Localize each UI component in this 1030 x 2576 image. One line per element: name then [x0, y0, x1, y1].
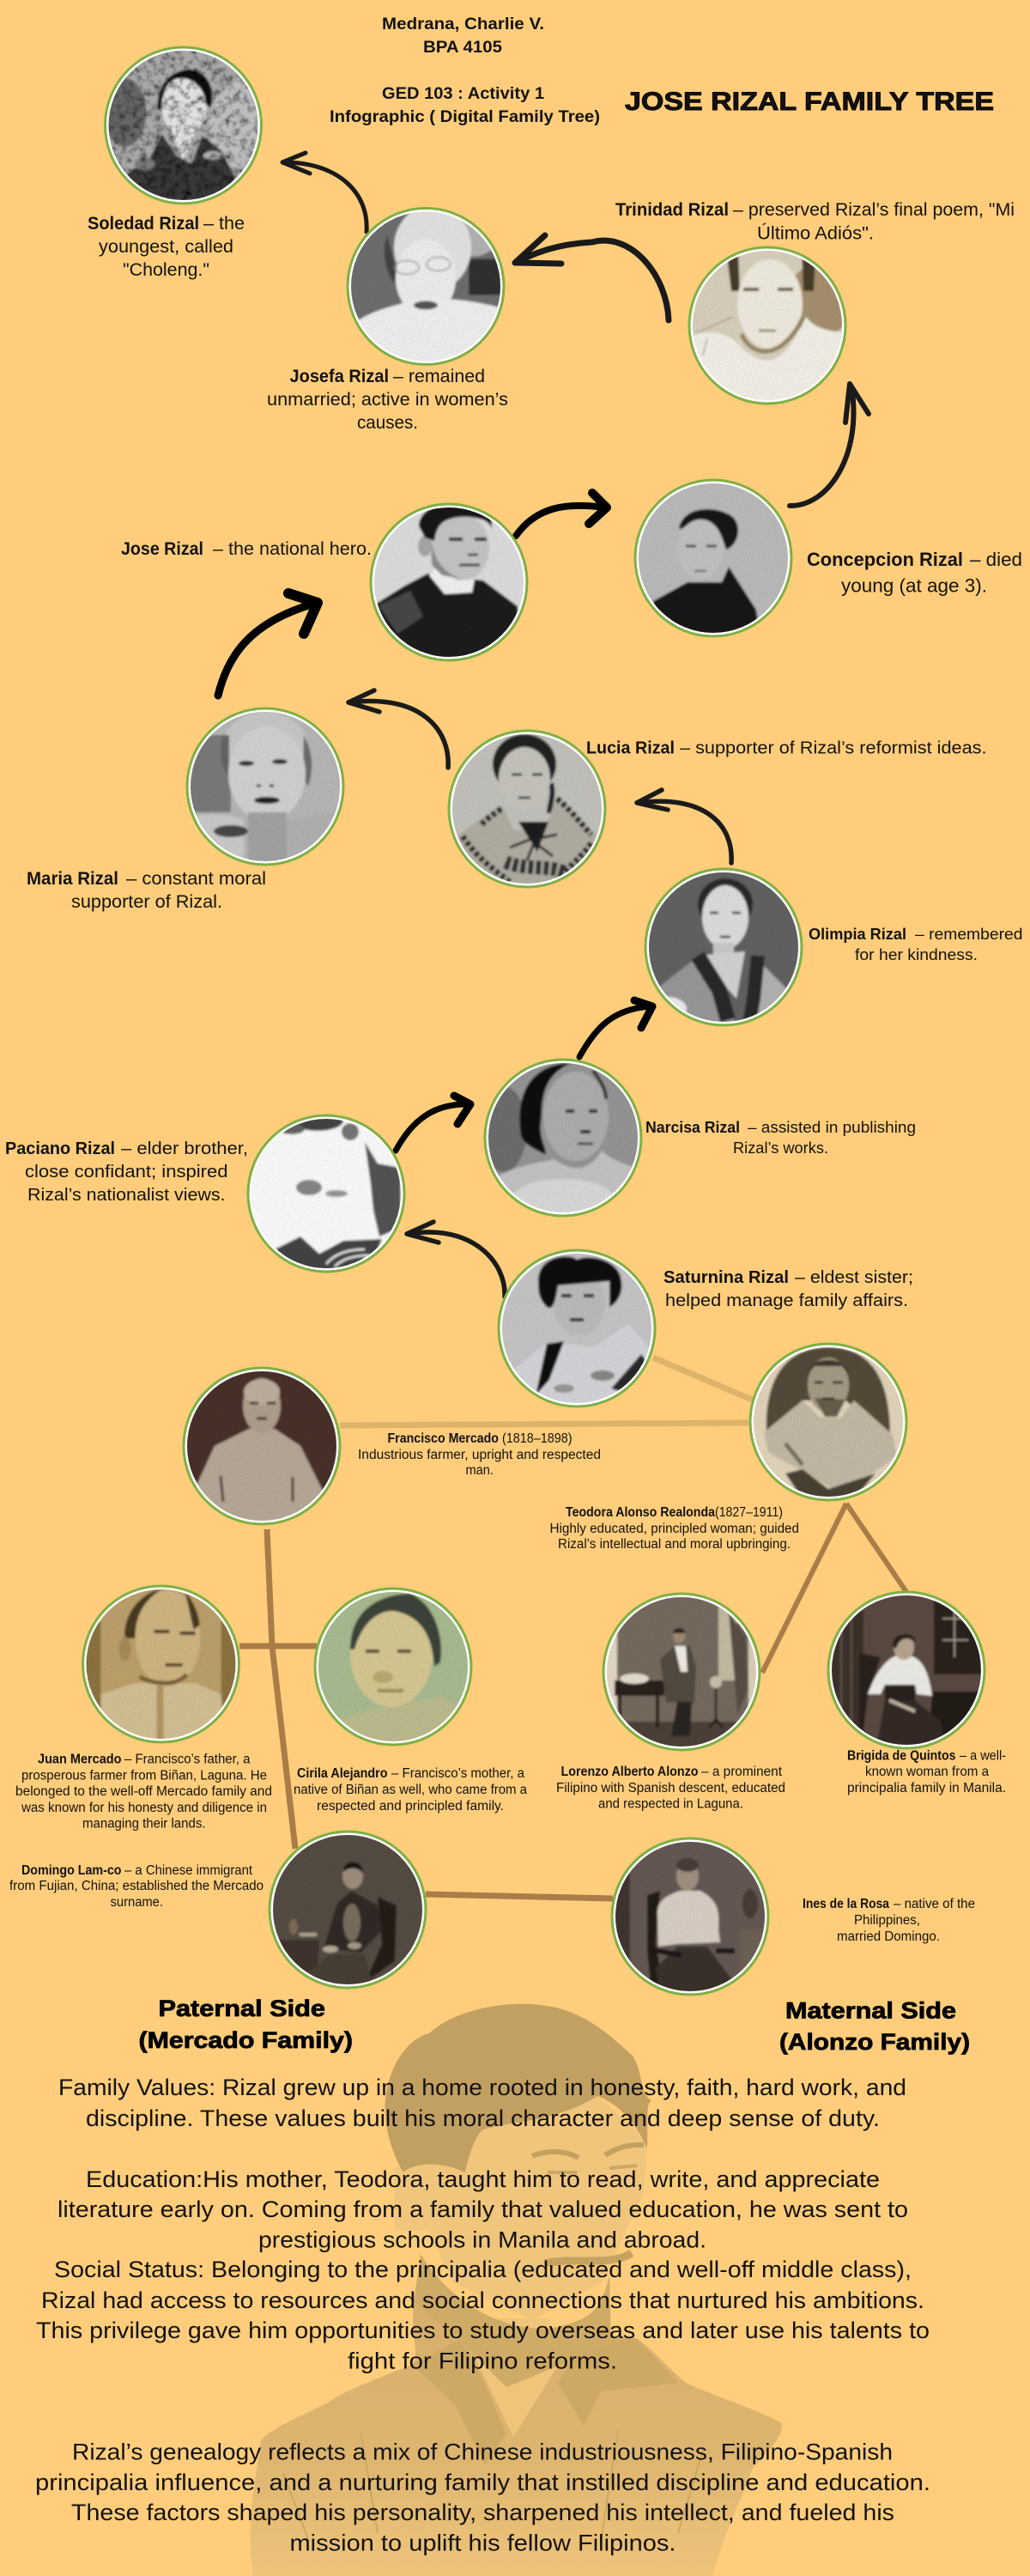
caption: Trinidad Rizal: – preserved Rizal’s final poem, "Mi [733, 200, 1015, 220]
portrait: Teodora Alonso Realonda [750, 1344, 906, 1500]
connector: Francisco to Teodora [340, 1423, 748, 1425]
portrait: Lorenzo Alberto Alonzo [603, 1594, 760, 1750]
caption: Concepcion Rizal: young (at age 3). [841, 575, 987, 596]
portrait: Ines de la Rosa [612, 1838, 768, 1995]
caption: Maria Rizal: Maria Rizal [27, 869, 118, 889]
caption: Teodora Alonso Realonda [549, 1505, 799, 1552]
caption: Paciano Rizal: close confidant; inspired [25, 1163, 228, 1182]
caption: Lucia Rizal: – supporter of Rizal’s reformist ideas. [680, 738, 987, 757]
portrait: Lucia Rizal [449, 731, 605, 887]
text block: social status: Social Status: Belonging to the principalia (educated and well-off middle class), [54, 2257, 912, 2282]
connector: Teodora to Lorenzo [762, 1504, 846, 1673]
caption: Jose Rizal: – the national hero. [213, 539, 372, 559]
heading: maternal side [779, 1997, 970, 2055]
caption: Paciano Rizal [5, 1139, 248, 1205]
caption: Juan Mercado: belonged to the well-off Mercado family and [15, 1784, 272, 1799]
text block: social status: Rizal had access to resources and social connections that nurtured his ambitions. [41, 2287, 924, 2313]
caption: Jose Rizal: Jose Rizal [121, 539, 203, 559]
text block: conclusion: Rizal’s genealogy reflects a mix of Chinese industriousness, Filipino-Spanish [72, 2439, 893, 2465]
arrow: Narcisa to Olimpia [579, 1000, 652, 1057]
caption: Soledad Rizal: "Choleng." [123, 260, 209, 280]
header: student details [330, 15, 600, 126]
caption: Teodora Alonso Realonda: (1827–1911) [715, 1505, 783, 1520]
caption: Josefa Rizal: causes. [357, 413, 418, 433]
caption: Brigida de Quintos: principalia family in Manila. [847, 1781, 1006, 1795]
text block: social status: fight for Filipino reforms. [348, 2348, 617, 2374]
caption: Maria Rizal: supporter of Rizal. [71, 892, 222, 912]
caption: Cirila Alejandro [294, 1766, 527, 1814]
portrait: Francisco Mercado [184, 1368, 340, 1524]
arrow: Jose to Concepcion [516, 493, 607, 536]
portrait: Concepcion Rizal [635, 480, 791, 636]
caption: Domingo Lam-co [9, 1863, 264, 1910]
caption: Juan Mercado: managing their lands. [82, 1817, 206, 1831]
caption: Juan Mercado: – Francisco’s father, a [124, 1752, 251, 1767]
caption: Brigida de Quintos: – a well- [960, 1748, 1006, 1764]
caption: Francisco Mercado: (1818–1898) [502, 1431, 572, 1446]
caption: Paciano Rizal: Paciano Rizal [5, 1139, 115, 1158]
caption: Soledad Rizal [88, 214, 245, 280]
text block: social status: This privilege gave him opportunities to study overseas and later use his talents to [36, 2318, 930, 2343]
arrow: Lucia to Maria [348, 690, 448, 768]
portrait: Narcisa Rizal [479, 1060, 641, 1220]
caption: Soledad Rizal: Soledad Rizal [88, 214, 199, 234]
caption: Lorenzo Alberto Alonzo: Lorenzo Alberto Alonzo [561, 1765, 699, 1779]
caption: Trinidad Rizal: Trinidad Rizal [615, 200, 729, 220]
caption: Juan Mercado: Juan Mercado [38, 1752, 122, 1767]
caption: Narcisa Rizal: Rizal’s works. [733, 1139, 828, 1157]
caption: Lorenzo Alberto Alonzo: and respected in Laguna. [598, 1796, 743, 1812]
connector: Domingo to Ines [426, 1894, 613, 1899]
portrait: Olimpia Rizal [645, 869, 802, 1025]
heading: paternal side: (Mercado Family) [139, 2027, 353, 2053]
caption: Narcisa Rizal: – assisted in publishing [748, 1118, 916, 1136]
portrait: Domingo Lam-co [270, 1832, 426, 1988]
caption: Lorenzo Alberto Alonzo: – a prominent [701, 1765, 783, 1779]
text block: family values [58, 2075, 906, 2131]
text block: family values: Family Values: Rizal grew up in a home rooted in honesty, faith, hard work, and [58, 2075, 906, 2100]
text block: education: literature early on. Coming from a family that valued education, he was sent to [58, 2196, 908, 2222]
arrow: Concepcion to Trinidad [790, 384, 869, 506]
caption: Ines de la Rosa: Philippines, [854, 1913, 920, 1928]
connector: Teodora to Brigida [846, 1504, 906, 1592]
caption: Olimpia Rizal [809, 925, 1023, 963]
caption: Josefa Rizal: unmarried; active in women’s [267, 390, 508, 410]
portrait: Juan Mercado [82, 1586, 239, 1742]
text block: social status [36, 2257, 930, 2374]
caption: Jose Rizal [121, 539, 372, 559]
text block: conclusion: principalia influence, and a nurturing family that instilled discipline and education. [35, 2470, 930, 2495]
caption: Lorenzo Alberto Alonzo [556, 1765, 785, 1812]
caption: Teodora Alonso Realonda: Teodora Alonso Realonda [566, 1505, 715, 1520]
caption: Francisco Mercado: man. [465, 1463, 494, 1478]
caption: Maria Rizal: – constant moral [126, 869, 266, 889]
caption: Lucia Rizal: Lucia Rizal [586, 738, 675, 757]
caption: Olimpia Rizal: for her kindness. [855, 945, 978, 963]
arrow: Olimpia to Lucia [637, 790, 731, 863]
caption: Olimpia Rizal: – remembered [915, 925, 1023, 943]
portrait: Saturnina Rizal [499, 1250, 655, 1406]
caption: Concepcion Rizal: Concepcion Rizal [807, 549, 963, 570]
caption: Trinidad Rizal [615, 200, 1015, 244]
caption: Teodora Alonso Realonda: Rizal’s intellectual and moral upbringing. [558, 1537, 791, 1552]
caption: Cirila Alejandro: respected and principled family. [317, 1799, 504, 1814]
caption: Soledad Rizal: youngest, called [99, 237, 233, 257]
portrait: Soledad Rizal [103, 47, 261, 204]
caption: Saturnina Rizal: helped manage family affairs. [665, 1291, 908, 1310]
portrait: Josefa Rizal [348, 204, 504, 364]
caption: Domingo Lam-co: – a Chinese immigrant [124, 1863, 253, 1878]
caption: Brigida de Quintos: Brigida de Quintos [847, 1748, 956, 1764]
caption: Paciano Rizal: – elder brother, [121, 1139, 248, 1158]
caption: Brigida de Quintos: known woman from a [865, 1765, 989, 1779]
caption: Cirila Alejandro: native of Biñan as well, who came from a [294, 1783, 527, 1797]
text block: conclusion: mission to uplift his fellow Filipinos. [290, 2530, 676, 2556]
caption: Maria Rizal [27, 869, 266, 912]
portrait: Paciano Rizal [248, 1110, 404, 1272]
caption: Lorenzo Alberto Alonzo: Filipino with Spanish descent, educated [556, 1781, 785, 1795]
arrow: Trinidad to Josefa [515, 235, 669, 320]
title: JOSE RIZAL FAMILY TREE [625, 88, 994, 116]
caption: Ines de la Rosa: Ines de la Rosa [803, 1897, 889, 1911]
caption: Concepcion Rizal: – died [970, 549, 1022, 570]
caption: Saturnina Rizal [663, 1268, 913, 1310]
heading: paternal side [139, 1996, 353, 2053]
caption: Olimpia Rizal: Olimpia Rizal [809, 925, 906, 943]
portrait: Cirila Alejandro [315, 1589, 471, 1745]
caption: Narcisa Rizal [645, 1118, 916, 1157]
text block: conclusion: These factors shaped his personality, sharpened his intellect, and fueled his [71, 2500, 894, 2525]
heading: maternal side: (Alonzo Family) [779, 2029, 970, 2055]
portrait: Trinidad Rizal [689, 247, 855, 404]
header: student details: Infographic ( Digital Family Tree) [330, 107, 600, 126]
header: student details: Medrana, Charlie V. [382, 15, 544, 33]
header: student details: BPA 4105 [423, 38, 502, 57]
connector: Francisco down to Domingo [267, 1529, 295, 1849]
connector: Juan to Cirila [239, 1643, 317, 1649]
arrow: Saturnina to Paciano [407, 1222, 505, 1297]
caption: Juan Mercado: was known for his honesty and diligence in [21, 1801, 267, 1815]
heading: maternal side: Maternal Side [785, 1997, 956, 2023]
caption: Saturnina Rizal: – eldest sister; [795, 1268, 913, 1287]
arrow: Maria to Jose [218, 593, 318, 696]
caption: Cirila Alejandro: – Francisco’s mother, a [391, 1766, 524, 1781]
caption: Ines de la Rosa: – native of the [894, 1897, 975, 1911]
caption: Francisco Mercado: Industrious farmer, upright and respected [358, 1448, 601, 1462]
heading: paternal side: Paternal Side [158, 1996, 325, 2021]
caption: Soledad Rizal: – the [203, 214, 245, 234]
caption: Brigida de Quintos [847, 1748, 1006, 1795]
arrow: Josefa to Soledad [282, 153, 367, 232]
text block: conclusion [35, 2439, 930, 2556]
caption: Concepcion Rizal [807, 549, 1022, 596]
caption: Cirila Alejandro: Cirila Alejandro [297, 1766, 388, 1781]
text block: education: Education:His mother, Teodora, taught him to read, write, and appreciate [86, 2166, 880, 2192]
caption: Josefa Rizal [267, 367, 508, 433]
caption: Trinidad Rizal: Último Adiós". [757, 223, 874, 244]
caption: Teodora Alonso Realonda: Highly educated, principled woman; guided [549, 1522, 799, 1536]
caption: Saturnina Rizal: Saturnina Rizal [663, 1268, 789, 1287]
caption: Narcisa Rizal: Narcisa Rizal [645, 1118, 740, 1136]
caption: Domingo Lam-co: Domingo Lam-co [21, 1863, 122, 1878]
caption: Domingo Lam-co: from Fujian, China; established the Mercado [9, 1879, 264, 1893]
portrait: Maria Rizal [187, 708, 343, 865]
connector: Saturnina to Teodora [653, 1358, 752, 1400]
header: student details: GED 103 : Activity 1 [382, 84, 544, 103]
caption: Francisco Mercado [358, 1431, 601, 1478]
text block: family values: discipline. These values built his moral character and deep sense of duty. [86, 2105, 880, 2131]
arrow: Paciano to Narcisa [396, 1096, 470, 1151]
portrait: Jose Rizal [371, 501, 527, 660]
portrait: Brigida de Quintos [828, 1592, 985, 1748]
caption: Francisco Mercado: Francisco Mercado [388, 1431, 499, 1446]
caption: Paciano Rizal: Rizal’s nationalist views. [27, 1186, 225, 1205]
caption: Josefa Rizal: Josefa Rizal [290, 367, 389, 386]
caption: Ines de la Rosa: married Domingo. [837, 1929, 940, 1944]
caption: Juan Mercado: prosperous farmer from Biñan, Laguna. He [21, 1769, 267, 1783]
caption: Domingo Lam-co: surname. [110, 1895, 163, 1910]
caption: Josefa Rizal: – remained [393, 367, 485, 386]
text block: education [58, 2166, 908, 2253]
caption: Ines de la Rosa [803, 1897, 975, 1944]
text block: education: prestigious schools in Manila and abroad. [258, 2227, 706, 2253]
watermark: portrait of Rizal [251, 2004, 782, 2576]
caption: Juan Mercado [15, 1752, 272, 1831]
